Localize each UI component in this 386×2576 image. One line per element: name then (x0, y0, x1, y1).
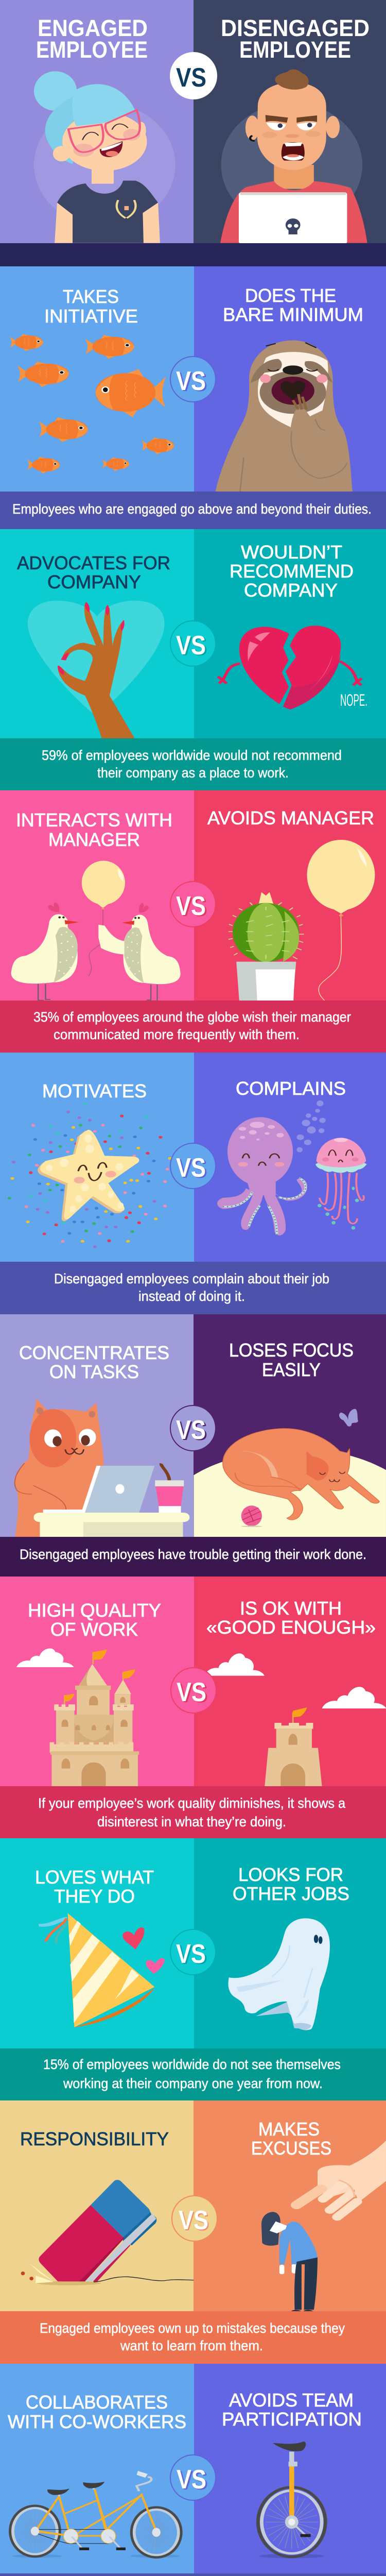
caption text: Disengaged employees have trouble getting their work done. (20, 1547, 366, 1562)
caption text: Engaged employees own up to mistakes because they (40, 2320, 345, 2336)
heading: engaged employee: ENGAGED (38, 15, 148, 41)
vs badge: VS (176, 1939, 206, 1969)
heading: disengaged employee (221, 15, 370, 63)
illustration: yawning sloth (216, 341, 353, 492)
vs badge: VS (178, 367, 207, 397)
heading: disengaged employee: EMPLOYEE (239, 37, 351, 63)
panel: collaborates vs avoids team participation (0, 2364, 386, 2576)
illustration: party hat and hearts (40, 1913, 165, 2027)
caption text: Disengaged employees complain about their job (54, 1271, 329, 1286)
caption text: communicated more frequently with them. (54, 1027, 300, 1042)
heading: complains: COMPLAINS (236, 1078, 346, 1099)
illustration: broken heart with arms (218, 625, 362, 709)
vs badge: VS (176, 1415, 206, 1445)
vs badge (170, 882, 216, 927)
panel: interacts vs avoids manager (0, 790, 386, 1053)
illustration: cactus in pot (229, 892, 304, 1001)
illustration: confetti (9, 1104, 170, 1247)
heading: is ok with good enough: «GOOD ENOUGH» (206, 1617, 376, 1638)
heading: avoids team participation: PARTICIPATION (222, 2409, 362, 2430)
panel: advocates vs wouldn't recommend (0, 529, 386, 790)
illustration: ok hand over heart (28, 601, 165, 740)
heading: advocates for company (17, 552, 170, 592)
vs badge (170, 621, 216, 666)
caption bar (0, 1262, 386, 1314)
caption text (38, 1795, 346, 1829)
heading: looks for other jobs: LOOKS FOR (238, 1864, 343, 1885)
panel: takes initiative vs bare minimum (0, 266, 386, 529)
panel: engaged vs disengaged header (0, 0, 386, 266)
vs badge (171, 1668, 216, 1713)
caption bar (0, 2048, 386, 2100)
caption text (40, 2320, 345, 2353)
heading: high quality of work (28, 1600, 161, 1640)
vs badge: VS (178, 1416, 207, 1446)
caption text: disinterest in what they’re doing. (97, 1814, 286, 1829)
illustration: pointing hand (296, 2141, 386, 2217)
illustration: chickens with balloon (11, 861, 181, 1001)
illustration: sleeping cat (194, 1409, 386, 1537)
vs badge (170, 357, 216, 402)
heading: loves what they do: LOVES WHAT (35, 1867, 154, 1888)
illustration: sad octopus (217, 1117, 307, 1235)
vs badge (170, 1143, 216, 1189)
vs badge: VS (178, 1154, 207, 1184)
heading: motivates: MOTIVATES (42, 1080, 147, 1101)
illustration: floating ghost (228, 1918, 330, 2030)
heading: loves what they do (35, 1867, 154, 1907)
caption text (54, 1271, 329, 1304)
illustration: large sand castle (16, 1648, 139, 1786)
heading: makes excuses (251, 2119, 331, 2159)
vs badge: VS (176, 366, 206, 396)
caption text (33, 1009, 351, 1042)
caption bar (0, 738, 386, 790)
heading: disengaged employee: DISENGAGED (221, 15, 370, 41)
heading: engaged employee: EMPLOYEE (36, 37, 148, 63)
heading: wouldn't recommend company: COMPANY (244, 580, 338, 601)
heading: looks for other jobs: OTHER JOBS (233, 1883, 349, 1904)
heading: high quality of work: HIGH QUALITY (28, 1600, 161, 1621)
vs badge: VS (180, 2207, 209, 2236)
heading: engaged employee (36, 15, 148, 63)
illustration: unicycle (258, 2442, 325, 2558)
heading: interacts with manager: INTERACTS WITH (16, 809, 172, 831)
heading: is ok with good enough: IS OK WITH (240, 1598, 342, 1619)
vs badge (172, 2196, 217, 2241)
caption text: 59% of employees worldwide would not recommend (42, 748, 342, 763)
heading: collaborates with co-workers: WITH CO-WORKERS (8, 2411, 186, 2432)
heading: interacts with manager (16, 809, 172, 850)
caption bar: header (0, 243, 386, 266)
caption bar (0, 492, 386, 529)
heading: loves what they do: THEY DO (54, 1886, 135, 1907)
heading: does the bare minimum: BARE MINIMUM (223, 304, 363, 325)
vs badge: VS (178, 1940, 207, 1970)
heading: concentrates on tasks: CONCENTRATES (19, 1342, 169, 1363)
heading: high quality of work: OF WORK (50, 1619, 138, 1640)
panel: loves what they do vs looks for other jobs (0, 1838, 386, 2100)
vs badge: VS (178, 1679, 208, 1708)
panel: responsibility vs makes excuses (0, 2100, 386, 2364)
vs badge: VS (176, 631, 206, 660)
caption bar (0, 2311, 386, 2364)
heading: does the bare minimum: DOES THE (245, 285, 336, 306)
heading: loses focus easily: LOSES FOCUS (229, 1340, 354, 1361)
heading: takes initiative: TAKES (63, 286, 119, 307)
caption text: 35% of employees around the globe wish their manager (33, 1009, 351, 1025)
illustration: bubbles (296, 1100, 326, 1153)
vs badge: VS (178, 2466, 208, 2496)
caption bar (0, 1537, 386, 1577)
heading: takes initiative (44, 286, 138, 327)
illustration: school of orange fish (10, 334, 174, 473)
vs badge: VS (176, 891, 206, 921)
heading: wouldn't recommend company (230, 541, 354, 601)
heading: advocates for company: ADVOCATES FOR (17, 552, 170, 573)
illustration: happy engaged employee (34, 71, 176, 243)
vs badge (170, 1929, 216, 1975)
heading: responsibility: RESPONSIBILITY (20, 2128, 169, 2149)
caption text: instead of doing it. (138, 1289, 245, 1304)
illustration: floating balloon (307, 840, 375, 1001)
heading: avoids team participation: AVOIDS TEAM (229, 2389, 354, 2411)
heading: is ok with good enough (206, 1598, 376, 1638)
illustration: ashamed employee (261, 2212, 318, 2312)
illustration: cat at laptop (15, 1399, 189, 1537)
vs badge: VS (177, 2465, 206, 2495)
vs badge (170, 2455, 216, 2500)
vs badge: VS (176, 1153, 206, 1183)
heading: makes excuses: EXCUSES (251, 2138, 331, 2159)
vs badge: VS (178, 632, 207, 662)
illustration: tandem bicycle (10, 2471, 181, 2558)
vs badge: VS (179, 2206, 208, 2235)
heading: concentrates on tasks: ON TASKS (49, 1361, 139, 1382)
illustration: angry disengaged employee (220, 70, 367, 244)
illustration: smiling star (38, 1130, 139, 1221)
vs badge: VS (177, 1677, 206, 1707)
caption bar (0, 1786, 386, 1838)
panel: motivates vs complains (0, 1053, 386, 1314)
caption text (43, 2057, 341, 2091)
heading: concentrates on tasks (19, 1342, 169, 1382)
vs badge: VS (178, 892, 207, 922)
caption text: their company as a place to work. (97, 765, 289, 781)
heading: makes excuses: MAKES (258, 2119, 320, 2140)
vs badge: VS (176, 63, 206, 93)
vs badge (170, 1405, 216, 1451)
caption bar (0, 2573, 386, 2576)
panel: concentrates vs loses focus (0, 1314, 386, 1577)
illustration: eraser (21, 2180, 194, 2285)
illustration: small sand tower and clouds (204, 1653, 386, 1786)
caption text: working at their company one year from now. (63, 2076, 323, 2091)
vs badge (170, 52, 217, 99)
caption text: 15% of employees worldwide do not see themselves (43, 2057, 341, 2072)
heading: collaborates with co-workers: COLLABORATES (26, 2392, 168, 2413)
heading: wouldn't recommend company: RECOMMEND (230, 561, 354, 582)
heading: takes initiative: INITIATIVE (44, 306, 138, 327)
heading: does the bare minimum (223, 285, 363, 325)
panel: high quality vs good enough (0, 1577, 386, 1838)
illustration: sad jellyfish (315, 1138, 367, 1230)
heading: avoids manager: AVOIDS MANAGER (207, 807, 374, 828)
heading: looks for other jobs (233, 1864, 349, 1904)
caption text: want to learn from them. (120, 2338, 263, 2353)
heading: interacts with manager: MANAGER (48, 829, 140, 850)
heading: wouldn't recommend company: WOULDN’T (241, 541, 342, 563)
caption text (42, 748, 342, 781)
heading: avoids team participation (222, 2389, 362, 2430)
heading: loses focus easily: EASILY (262, 1359, 321, 1380)
heading: advocates for company: COMPANY (47, 571, 141, 592)
heading: collaborates with co-workers (8, 2392, 186, 2432)
heading: loses focus easily (229, 1340, 354, 1380)
caption text: If your employee’s work quality diminishes, it shows a (38, 1795, 346, 1811)
caption bar (0, 1001, 386, 1053)
